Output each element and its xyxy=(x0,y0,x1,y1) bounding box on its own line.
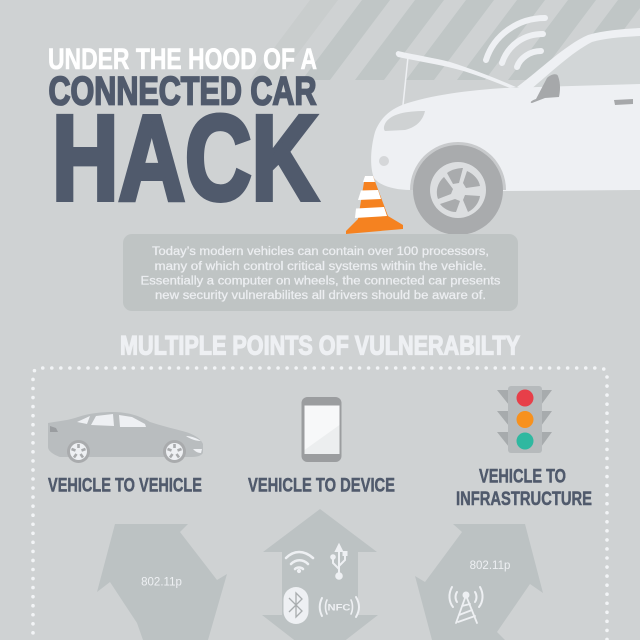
rim openings xyxy=(437,168,480,212)
icon: smartphone xyxy=(302,397,342,462)
headlight xyxy=(384,111,425,131)
protocol label: 802.11p xyxy=(141,576,182,588)
label: vehicle to vehicle: VEHICLE TO VEHICLE xyxy=(48,476,202,496)
title line 1: UNDER THE HOOD OF A xyxy=(48,43,317,76)
icon: sedan car xyxy=(48,412,203,463)
intro text: Today’s modern vehicles can contain over 100 processors, xyxy=(152,246,489,258)
raised hood xyxy=(396,51,516,88)
icon: wifi signal xyxy=(486,18,545,67)
front wheel xyxy=(163,440,186,463)
title xyxy=(48,43,318,226)
icon: traffic cone xyxy=(346,176,403,234)
label: vehicle to infrastructure: VEHICLE TO xyxy=(479,466,566,488)
wheel arch xyxy=(410,142,506,190)
door handle xyxy=(614,99,633,105)
green light xyxy=(516,432,534,450)
side mirror xyxy=(531,74,560,103)
fog light xyxy=(379,156,389,166)
car lights xyxy=(186,436,202,453)
orange light xyxy=(516,411,534,428)
arrow: vehicle to device link xyxy=(262,509,378,640)
car windows xyxy=(77,414,146,427)
title line 3: HACK xyxy=(52,90,318,226)
label: vehicle to infrastructure: INFRASTRUCTURE xyxy=(456,489,592,510)
panel: introduction xyxy=(123,234,518,311)
icon: wifi xyxy=(286,552,313,572)
rim xyxy=(430,162,486,218)
arrow: vehicle to vehicle link xyxy=(97,524,227,640)
intro text: many of which control critical systems within the vehicle. xyxy=(154,261,486,273)
intro text: new security vulnerabilites all drivers should be aware of. xyxy=(155,290,486,302)
icon: nfc xyxy=(320,597,359,617)
protocol label: 802.11p xyxy=(470,560,510,572)
red light xyxy=(516,390,534,406)
intro text xyxy=(140,246,501,302)
label: vehicle to infrastructure xyxy=(456,466,592,510)
rear wheel xyxy=(67,440,90,463)
title line 2: CONNECTED CAR xyxy=(48,70,316,114)
label: vehicle to device: VEHICLE TO DEVICE xyxy=(248,476,395,496)
section heading: MULTIPLE POINTS OF VULNERABILTY xyxy=(120,330,520,360)
background hazard stripes xyxy=(250,0,640,80)
icon: nfc: NFC xyxy=(328,602,351,614)
rear light xyxy=(50,426,58,432)
illustration: white car with open hood xyxy=(371,28,640,235)
car body xyxy=(371,84,640,191)
hood prop rod xyxy=(403,57,408,105)
icon: traffic light xyxy=(497,386,552,453)
arrow: vehicle to infrastructure link xyxy=(415,524,543,640)
windshield pillar xyxy=(517,28,640,90)
intro text: Essentially a computer on wheels, the connected car presents xyxy=(140,276,501,288)
car window xyxy=(519,30,640,88)
icon: cell tower xyxy=(449,587,483,623)
icon: bluetooth xyxy=(284,587,308,624)
icon: usb xyxy=(331,545,346,579)
dotted panel border xyxy=(33,368,607,640)
tire xyxy=(413,145,503,235)
